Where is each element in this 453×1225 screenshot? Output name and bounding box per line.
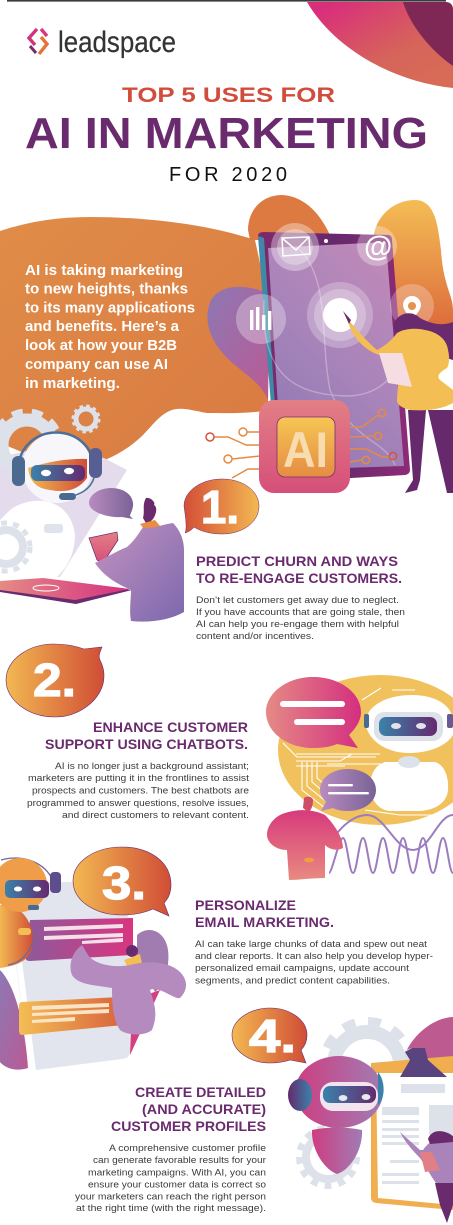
intro text: company can use AI [25, 357, 168, 373]
woman lilac [70, 945, 186, 1034]
corner swoosh [307, 2, 453, 88]
section 1 text: Don’t let customers get away due to neglect. [196, 595, 399, 606]
phone white edge [12, 930, 36, 1070]
section 1 text: AI can help you re-engage them with helpful [196, 619, 399, 630]
number bubble 2 [6, 644, 104, 717]
icon: at sign: @ [364, 231, 392, 263]
tablet held [89, 532, 118, 563]
section 3 text: and clear reports. It can also help you develop hyper- [195, 951, 433, 962]
lilac backdrop [0, 448, 127, 577]
title [25, 84, 428, 186]
section 1 text: If you have accounts that are going stale, then [196, 607, 405, 618]
circuit lines [283, 688, 453, 815]
number bubble 4 [232, 1008, 307, 1063]
section 1 text: PREDICT CHURN AND WAYS [196, 553, 398, 569]
headset [12, 432, 102, 500]
robot head [288, 1056, 384, 1128]
icon: at sign [357, 226, 397, 266]
waves [328, 815, 453, 873]
lilac leaf left [0, 970, 28, 1070]
purple speech bubble [320, 769, 376, 811]
section 3 text: personalized email campaigns, update account [195, 963, 409, 974]
section 4 text: A comprehensive customer profile [109, 1143, 266, 1154]
panel: orange intro blob [0, 217, 268, 467]
head and hair [143, 498, 156, 525]
robot body white [370, 762, 448, 811]
gear large [0, 412, 60, 478]
logo: leadspace: leadspace [58, 26, 176, 59]
robot head [22, 433, 92, 503]
phone screen [268, 242, 404, 470]
section 1 text [196, 553, 405, 642]
icon: location pin [390, 284, 434, 328]
yellow message bar [19, 997, 123, 1035]
neck [140, 520, 160, 530]
section 2 text: AI is no longer just a background assistant; [55, 761, 249, 772]
section 4 text: (AND ACCURATE) [142, 1101, 266, 1117]
section 3 text [195, 897, 433, 986]
gear lower [0, 523, 30, 571]
robot 1 illustration [0, 406, 127, 587]
robot neck [398, 756, 420, 768]
robot visor [28, 459, 87, 491]
pink leaf [130, 990, 160, 1055]
section 4 text: your marketers can reach the right person [75, 1192, 266, 1202]
section 4 text: CUSTOMER PROFILES [111, 1118, 266, 1134]
lilac pink leaf [403, 1017, 453, 1062]
section 3 text: PERSONALIZE [195, 897, 296, 913]
number bubble 3: 3. [102, 857, 146, 909]
section 3 text: AI can take large chunks of data and spew out neat [195, 939, 427, 950]
woman purple [400, 1131, 453, 1223]
intro text: in marketing. [25, 376, 120, 392]
blob: lilac left of phone [207, 287, 270, 400]
intro text: to new heights, thanks [25, 282, 188, 298]
blob: orange behind phone [248, 195, 332, 240]
body [95, 523, 184, 622]
pink speech bubble [266, 677, 361, 748]
gear small [73, 406, 99, 432]
AI chip: AI [283, 422, 328, 478]
number bubble 1: 1. [201, 481, 239, 533]
lilac leaf right [137, 930, 168, 992]
gear small [299, 1128, 357, 1186]
section 2 text: marketers are putting it in the frontlines to assist [28, 773, 249, 784]
AI chip [259, 400, 350, 493]
blob: yellow behind phone [373, 200, 453, 330]
number bubble 3 [73, 847, 171, 916]
intro text: to its many applications [25, 300, 195, 316]
purple message bar [25, 918, 133, 961]
robot head [364, 695, 453, 753]
title: TOP 5 USES FOR [122, 84, 335, 107]
intro text: AI is taking marketing [25, 263, 183, 279]
icon: bar chart [236, 294, 286, 344]
gear large [323, 1021, 411, 1109]
illustration: email personalise [0, 858, 186, 1070]
woman: yellow jumper and arm [347, 318, 453, 410]
number bubble 2: 2. [33, 654, 76, 706]
title: FOR 2020 [169, 164, 287, 186]
man with tablet [89, 488, 184, 622]
woman: clipboard [379, 353, 412, 387]
man in pink [267, 797, 343, 880]
woman: hand pointer [343, 311, 351, 324]
robot badge [44, 524, 63, 533]
yellow circuit circle [278, 675, 453, 825]
woman: legs [405, 410, 453, 493]
section 2 text: and direct customers to relevant content. [62, 810, 249, 821]
phone edge [258, 236, 280, 482]
illustration: chatbot [266, 675, 453, 880]
section 2 text [27, 719, 249, 821]
section 2 text: SUPPORT USING CHATBOTS. [45, 736, 248, 752]
speech bubble small [89, 488, 133, 519]
section 2 text: ENHANCE CUSTOMER [93, 719, 248, 735]
phone camera dot [324, 239, 328, 243]
section 3 text: segments, and predict content capabilities. [195, 976, 390, 986]
title: AI IN MARKETING [25, 109, 428, 158]
section 4 text [75, 1084, 267, 1214]
robot orange [0, 858, 61, 968]
intro text [25, 263, 195, 392]
phone grey [5, 882, 130, 1070]
circuit traces [206, 409, 397, 478]
section 4 text: CREATE DETAILED [135, 1084, 266, 1100]
illustration: phone hero [207, 195, 453, 493]
section 4 text: can generate favorable results for your [93, 1155, 267, 1166]
robot body [0, 501, 75, 587]
section 4 text: marketing campaigns. With AI, you can [88, 1168, 266, 1178]
clipboard [371, 1048, 453, 1210]
section 2 text: programmed to answer questions, resolve issues, [27, 798, 249, 809]
section 3 text: EMAIL MARKETING. [195, 914, 334, 930]
intro text: and benefits. Here’s a [25, 319, 180, 335]
section 4 text: ensure your customer data is correct so [88, 1180, 266, 1190]
number bubble 4: 4. [249, 1010, 296, 1062]
icon: envelope [271, 223, 319, 271]
section 4 text: at the right time (with the right message). [76, 1203, 266, 1214]
section 1 text: TO RE-ENGAGE CUSTOMERS. [196, 570, 402, 586]
screen arcs [264, 250, 402, 465]
target rings [307, 282, 373, 348]
woman: head and hair [393, 313, 453, 360]
tablet flat [0, 578, 132, 604]
section 1 text: content and/or incentives. [196, 631, 314, 642]
illustration: profile robot [288, 1017, 453, 1223]
section 2 text: prospects and customers. The best chatbots are [32, 786, 249, 796]
robot body [312, 1128, 362, 1174]
top edge line [7, 0, 446, 2]
intro text: look at how your B2B [25, 338, 177, 354]
phone body [258, 232, 410, 482]
number bubble 1 [184, 479, 259, 534]
